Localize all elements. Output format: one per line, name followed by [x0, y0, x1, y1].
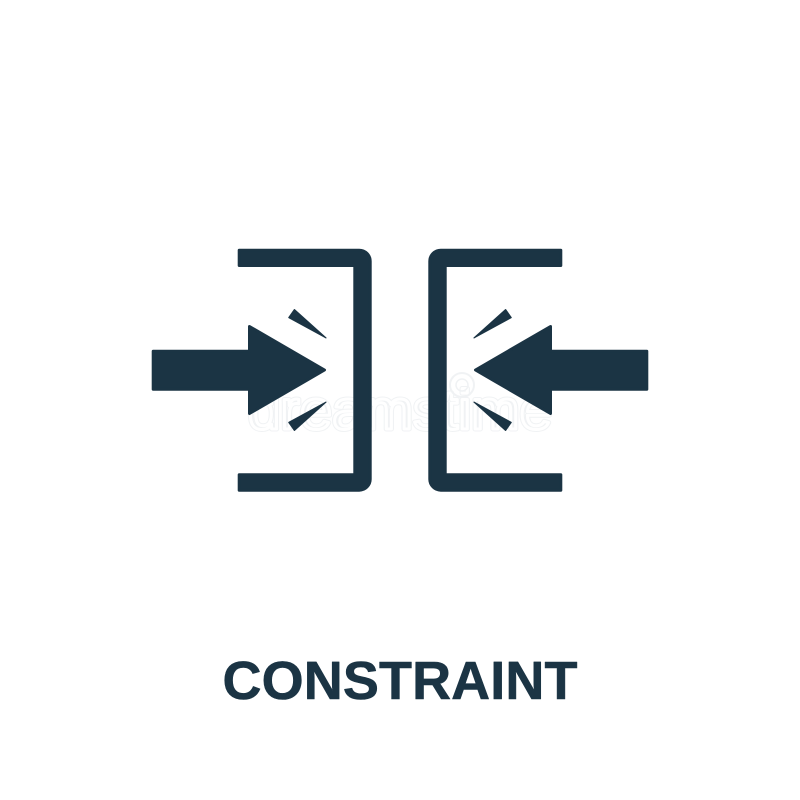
left arrow — [153, 326, 324, 414]
right arrow — [476, 326, 647, 414]
watermark: dreamstime — [248, 378, 552, 441]
left upper spark — [289, 310, 326, 338]
right bracket — [430, 250, 561, 490]
title: CONSTRAINT — [222, 651, 578, 711]
watermark: dreamstime — [248, 378, 552, 441]
left lower spark — [289, 402, 326, 430]
right lower spark — [474, 402, 511, 430]
icon: left arrow pressing into bracket — [153, 250, 370, 490]
icon: right arrow pressing into bracket — [430, 250, 647, 490]
right upper spark — [474, 310, 511, 338]
left bracket — [239, 250, 370, 490]
